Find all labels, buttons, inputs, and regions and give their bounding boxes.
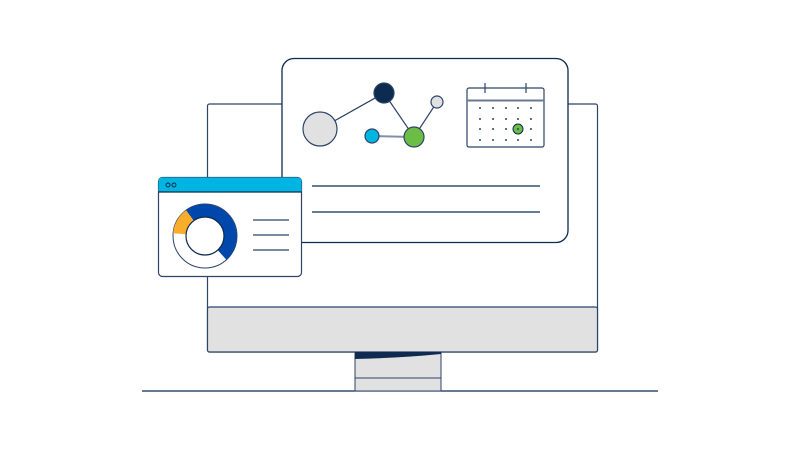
icon: calendar — [467, 83, 544, 147]
donut chart — [173, 204, 237, 268]
panel: network and calendar — [282, 58, 568, 242]
text lines — [312, 186, 540, 212]
panel: donut chart window — [158, 178, 302, 276]
network graph — [303, 83, 443, 147]
monitor stand — [355, 352, 441, 391]
monitor — [208, 104, 598, 352]
legend lines — [253, 220, 289, 250]
ground line — [142, 390, 658, 392]
